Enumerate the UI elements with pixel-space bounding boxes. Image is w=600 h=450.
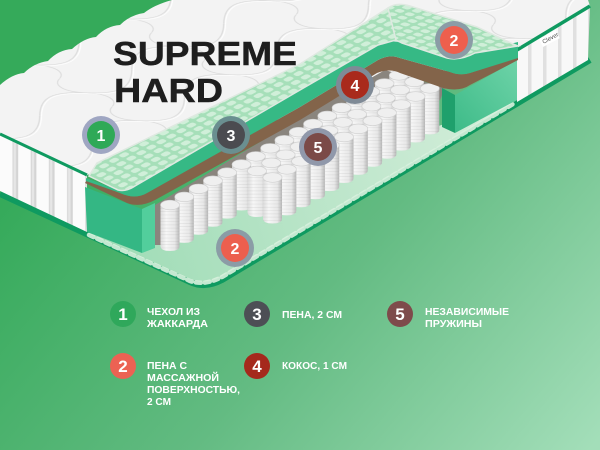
badge 4 on coir [336, 66, 374, 104]
massage foam surface left [89, 8, 396, 190]
title: SUPREME [113, 35, 297, 72]
legend item 2: МАССАЖНОЙ [147, 371, 219, 384]
legend item 2 [110, 353, 240, 408]
legend item 2: 2 СМ [147, 396, 171, 408]
legend item 3: 3 [252, 305, 262, 324]
legend item 4: КОКОС, 1 СМ [282, 360, 347, 372]
green foam band [86, 41, 518, 197]
badge 2 on massage surface lower: 2 [231, 241, 240, 258]
green base strip [0, 60, 590, 285]
legend item 2: ПЕНА С [147, 360, 187, 372]
legend item 5 [387, 301, 509, 330]
quilted top cover [0, 0, 590, 175]
title [113, 35, 297, 109]
legend item 2: 2 [118, 357, 128, 376]
scalloped foam edge [89, 104, 513, 283]
legend item 4 [244, 353, 347, 379]
legend item 5: НЕЗАВИСИМЫЕ [425, 306, 509, 318]
legend item 3 [244, 301, 342, 327]
legend item 4: 4 [252, 357, 262, 376]
legend item 1 [110, 301, 208, 330]
legend item 3: ПЕНА, 2 СМ [282, 309, 342, 321]
badge 2 on massage surface upper [435, 21, 473, 59]
badge 2 on massage surface lower [216, 229, 254, 267]
badge 1 on cover: 1 [97, 128, 106, 145]
green piping right [517, 6, 590, 50]
right foam block [442, 60, 517, 133]
badge 3 on foam: 3 [227, 128, 236, 145]
badge 1 on cover [82, 116, 120, 154]
legend item 1: ЖАККАРДА [146, 318, 208, 330]
badge 4 on coir: 4 [351, 78, 360, 95]
legend item 1: ЧЕХОЛ ИЗ [147, 306, 200, 318]
coconut coir layer [85, 56, 518, 205]
right pleated side [517, 5, 590, 102]
mattress cutaway illustration [0, 0, 590, 285]
brand tag: Clever [542, 32, 560, 46]
independent springs [160, 71, 439, 251]
brand tag [539, 30, 560, 47]
legend item 5: 5 [395, 305, 405, 324]
badge 5 on springs: 5 [314, 140, 323, 157]
badge 3 on foam [212, 116, 250, 154]
legend item 5: ПРУЖИНЫ [425, 318, 482, 330]
badge 2 on massage surface upper: 2 [450, 33, 459, 50]
massage foam surface right [388, 4, 518, 59]
dark cavity back wall [155, 70, 445, 245]
badge 5 on springs [299, 128, 337, 166]
massage foam bottom layer [87, 103, 513, 281]
legend item 2: ПОВЕРХНОСТЬЮ, [147, 384, 240, 396]
legend item 1: 1 [118, 305, 128, 324]
green piping front [0, 134, 87, 175]
title: HARD [114, 72, 223, 109]
left foam block [85, 187, 155, 253]
left pleated side [0, 132, 87, 232]
